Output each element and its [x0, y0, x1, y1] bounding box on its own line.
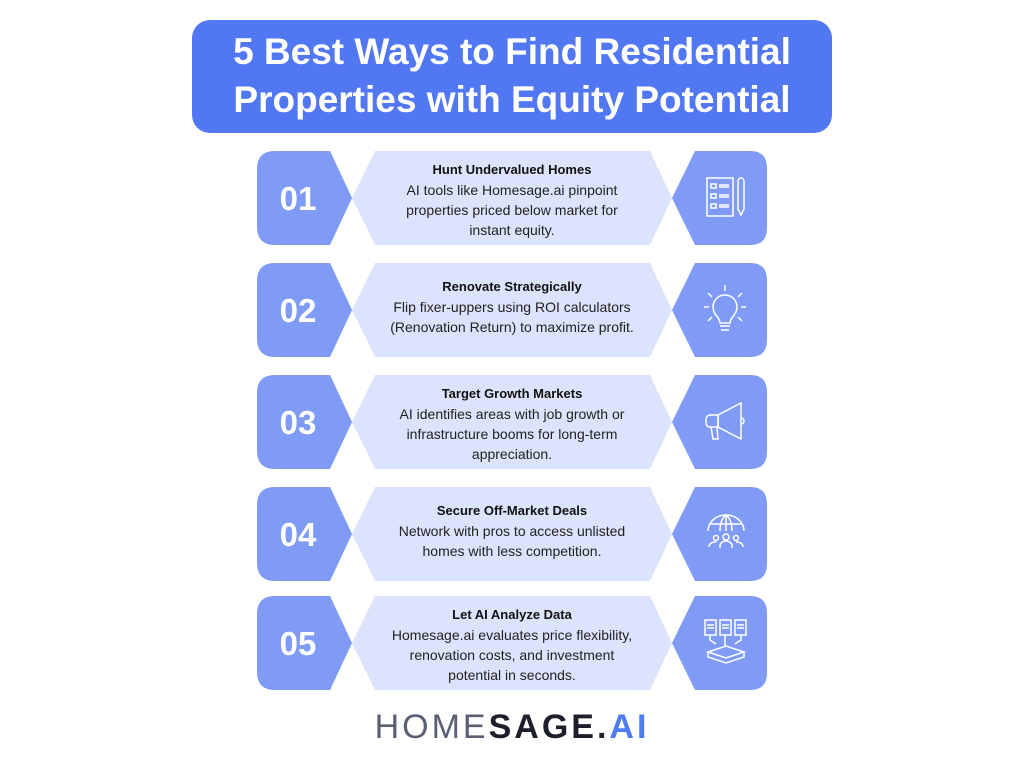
- icon: lightbulb: [672, 263, 767, 357]
- text panel 5: Homesage.ai evaluates price flexibility,: [392, 627, 632, 643]
- number badge 02: 02: [280, 292, 316, 329]
- text panel 1: [352, 151, 672, 245]
- text panel 5: potential in seconds.: [448, 667, 576, 683]
- row 5: [257, 596, 767, 690]
- number badge 01: [257, 151, 352, 245]
- text panel 1: properties priced below market for: [406, 202, 618, 218]
- text panel 1: Hunt Undervalued Homes: [433, 162, 591, 177]
- number badge 01: 01: [280, 180, 316, 217]
- text panel 3: appreciation.: [472, 446, 552, 462]
- text panel 2: Flip fixer-uppers using ROI calculators: [393, 299, 631, 315]
- text panel 2: Renovate Strategically: [442, 279, 582, 294]
- text panel 4: [352, 487, 672, 581]
- logo: HOMESAGE.AI: [375, 708, 649, 746]
- icon: documents into box: [672, 596, 767, 690]
- text panel 5: Let AI Analyze Data: [452, 607, 573, 622]
- title: [192, 20, 832, 133]
- text panel 4: homes with less competition.: [423, 543, 601, 559]
- title: Properties with Equity Potential: [233, 79, 791, 120]
- text panel 5: [352, 596, 672, 690]
- number badge 02: [257, 263, 352, 357]
- icon: megaphone: [672, 375, 767, 469]
- text panel 4: Network with pros to access unlisted: [399, 523, 625, 539]
- number badge 03: [257, 375, 352, 469]
- row 2: [257, 263, 767, 357]
- title: 5 Best Ways to Find Residential: [233, 31, 791, 72]
- text panel 3: Target Growth Markets: [442, 386, 582, 401]
- text panel 5: renovation costs, and investment: [410, 647, 614, 663]
- number badge 05: [257, 596, 352, 690]
- row 1: [257, 151, 767, 245]
- text panel 3: [352, 375, 672, 469]
- number badge 03: 03: [280, 404, 316, 441]
- number badge 05: 05: [280, 625, 316, 662]
- number badge 04: 04: [280, 516, 317, 553]
- text panel 3: infrastructure booms for long-term: [407, 426, 617, 442]
- text panel 1: instant equity.: [469, 222, 555, 238]
- icon: checklist: [672, 151, 767, 245]
- text panel 2: (Renovation Return) to maximize profit.: [390, 319, 634, 335]
- text panel 1: AI tools like Homesage.ai pinpoint: [407, 182, 618, 198]
- number badge 04: [257, 487, 352, 581]
- text panel 2: [352, 263, 672, 357]
- row 3: [257, 375, 767, 469]
- text panel 3: AI identifies areas with job growth or: [400, 406, 625, 422]
- row 4: [257, 487, 767, 581]
- text panel 4: Secure Off-Market Deals: [437, 503, 587, 518]
- icon: globe with people: [672, 487, 767, 581]
